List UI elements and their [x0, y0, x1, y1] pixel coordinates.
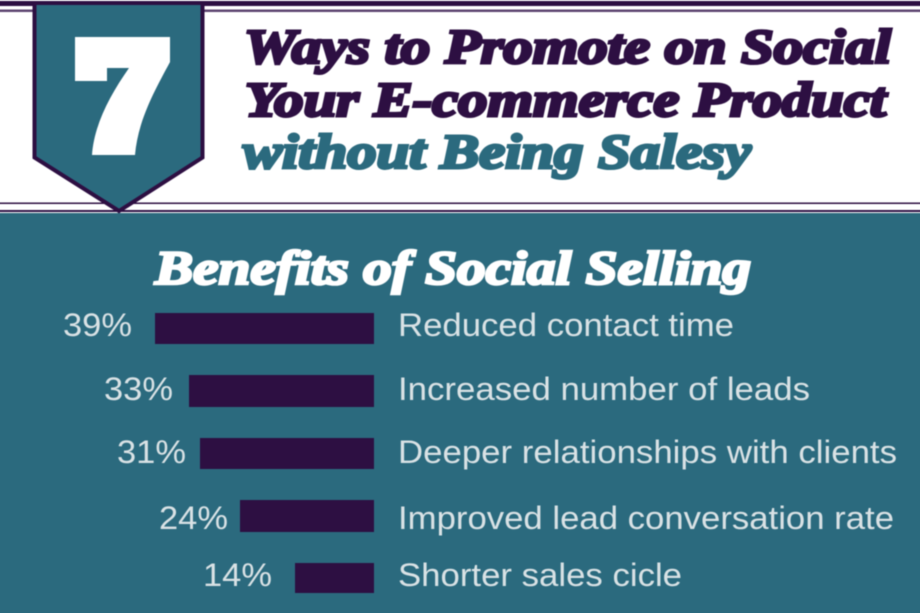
number 7	[75, 37, 170, 155]
row: reduced contact time	[63, 307, 734, 344]
row: improved lead conversation rate	[159, 500, 894, 536]
panel: benefits background	[0, 213, 920, 613]
row: shorter sales cicle: Shorter sales cicle	[398, 557, 682, 593]
heading: benefits of social selling: Benefits of Social Selling	[154, 242, 751, 295]
row: reduced contact time: Reduced contact time	[398, 307, 734, 343]
row: improved lead conversation rate: 24%	[159, 500, 228, 536]
row: deeper relationships: Deeper relationships with clients	[398, 434, 897, 470]
row: shorter sales cicle	[203, 557, 682, 593]
icon: shield badge with number 7	[34, 3, 202, 211]
bar chart	[63, 307, 897, 593]
header background	[0, 0, 920, 213]
title	[243, 19, 891, 179]
row: increased number of leads: Increased number of leads	[398, 371, 810, 407]
row: increased number of leads	[104, 371, 810, 407]
title line 2: Your E-commerce Product	[245, 72, 888, 127]
row: deeper relationships	[117, 434, 897, 470]
row: shorter sales cicle: 14%	[203, 557, 272, 593]
title line 3: without Being Salesy	[243, 124, 751, 179]
row: improved lead conversation rate: Improved lead conversation rate	[398, 500, 894, 536]
row: reduced contact time: 39%	[63, 307, 132, 343]
row: deeper relationships: 31%	[117, 434, 186, 470]
row: increased number of leads: 33%	[104, 371, 173, 407]
title line 1: Ways to Promote on Social	[244, 19, 891, 74]
